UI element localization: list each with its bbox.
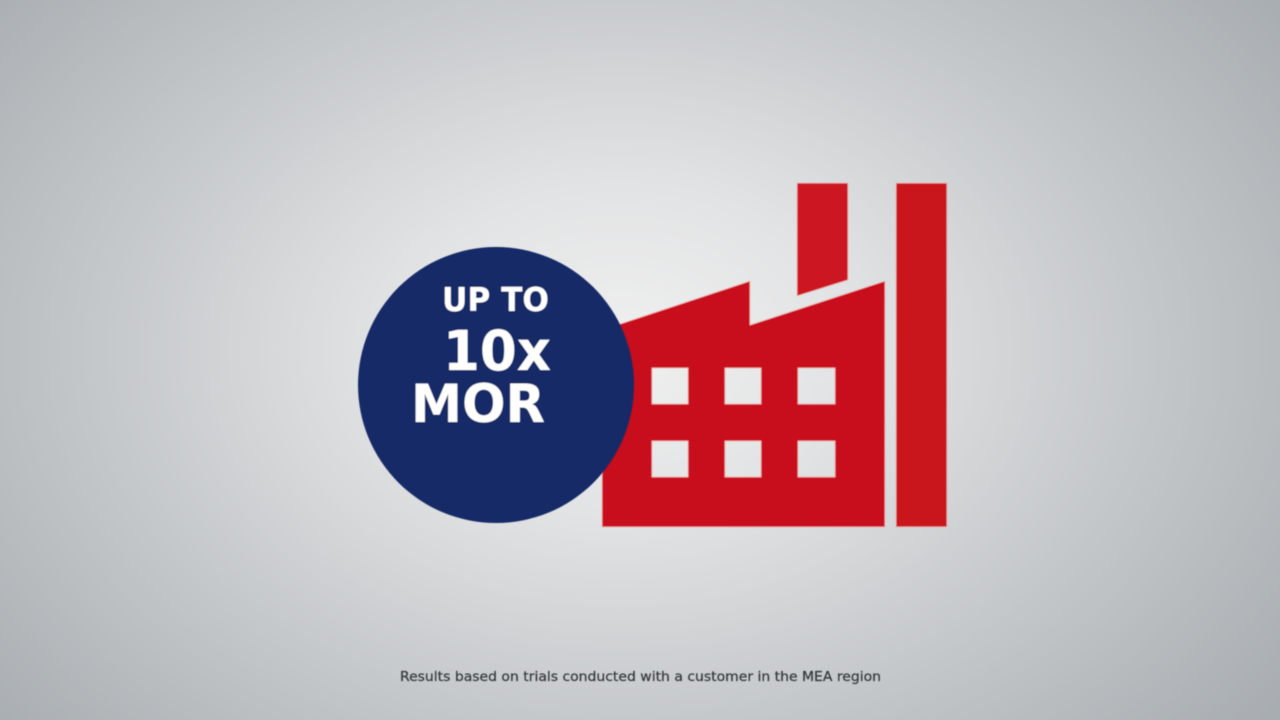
- callout: blue circle: [358, 247, 634, 523]
- text: MOR: MOR: [411, 374, 545, 435]
- icon: factory: [602, 183, 947, 527]
- short chimney: [797, 183, 848, 296]
- tall chimney: [896, 183, 947, 527]
- text: 10x: 10x: [443, 319, 551, 383]
- text: up to: UP TO: [442, 280, 549, 319]
- footnote: Results based on trials conducted with a customer in the MEA region: [400, 670, 881, 685]
- factory building: [602, 281, 885, 527]
